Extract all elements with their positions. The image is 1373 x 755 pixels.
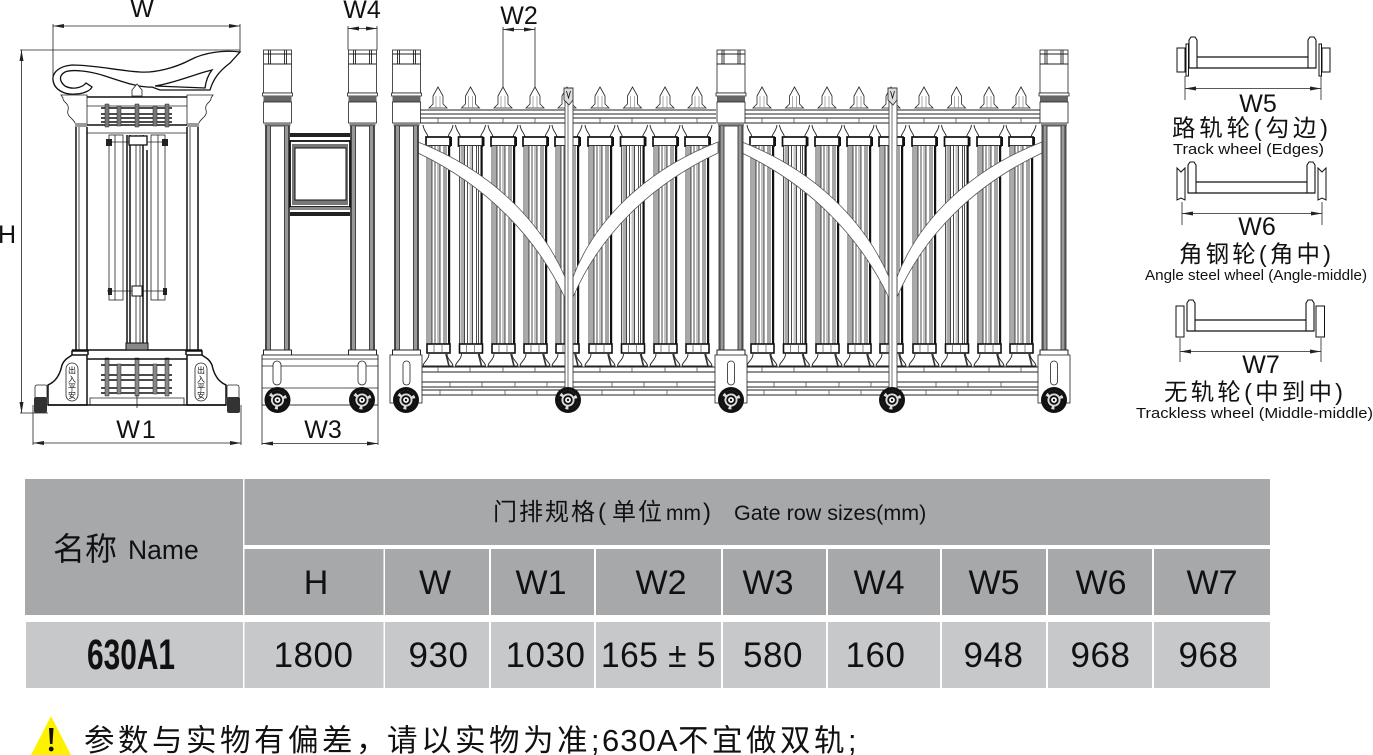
icon: trackless wheel axle — [1187, 300, 1314, 331]
ornamental top scroll — [53, 51, 240, 96]
table header cells: W5 — [968, 564, 1020, 602]
table data row: 630A1: 1030 — [506, 636, 585, 675]
dimension: W6 — [1182, 202, 1322, 241]
dimension: W7: W7 — [1242, 351, 1280, 379]
base scroll plates with lettering: 入 — [68, 375, 76, 384]
side view drawing with W3 and W4 dimensions — [262, 0, 381, 445]
label: angle steel wheel English: Angle steel wheel (Angle-middle) — [1145, 267, 1367, 284]
wheel type W5: track wheel — [1172, 37, 1330, 158]
icon: angle wheel profiles — [1177, 168, 1326, 200]
icon: track wheel hubs — [1177, 44, 1330, 76]
dimension: W2: W2 — [500, 2, 538, 30]
hanging gate bars — [106, 135, 168, 350]
dimension: W6: W6 — [1238, 213, 1276, 241]
base scroll plates with lettering: 出 — [68, 365, 76, 375]
table header: name cell: 名称 — [53, 531, 117, 567]
table data row: 630A1: 1800 — [274, 636, 353, 675]
post capitals and columns — [61, 95, 213, 355]
side wheels — [264, 387, 375, 413]
side control box panel — [290, 133, 350, 216]
base scroll plates with lettering: 出 — [197, 365, 205, 375]
top clamp hardware — [101, 104, 172, 127]
gate span two — [742, 87, 1042, 395]
table header: gate row sizes: 门排规格 — [493, 499, 597, 526]
dimension: W5: W5 — [1239, 90, 1277, 118]
icon: warning triangle — [31, 716, 71, 755]
label: trackless wheel: 无轨轮(中到中) — [1164, 379, 1343, 405]
label: track wheel: 路轨轮(勾边) — [1172, 115, 1328, 141]
table data row: 630A1: 160 — [846, 636, 905, 675]
gate elevation drawing with W2 dimension — [390, 2, 1070, 413]
gate wheels — [393, 387, 1067, 413]
table data row: 630A1: 948 — [964, 636, 1023, 675]
table header cells: W1 — [516, 564, 566, 602]
front castor wheels — [34, 385, 240, 413]
table data row: 630A1: 165 ± 5 — [601, 636, 716, 675]
icon: trackless wheel tyres — [1176, 306, 1324, 337]
icon: angle wheel axle — [1188, 162, 1315, 193]
table header cells: W2 — [636, 564, 686, 602]
side base frame — [262, 355, 378, 405]
gate posts — [392, 50, 1069, 355]
post base blocks — [390, 355, 1070, 403]
table header: name cell — [25, 479, 243, 615]
table header cells: W3 — [742, 564, 794, 602]
table data row: 630A1: 930 — [409, 636, 468, 675]
label: track wheel English: Track wheel (Edges) — [1173, 141, 1324, 158]
base scroll plates with lettering: 平 — [68, 383, 76, 392]
dimension: W7 — [1180, 338, 1321, 379]
table header cells — [244, 549, 1270, 615]
table header cells: W — [419, 564, 451, 602]
dimension: W3 — [262, 405, 378, 445]
table header: gate row sizes: ( — [598, 499, 606, 526]
table header cells: H — [304, 564, 328, 602]
table header: name cell: Name — [128, 535, 199, 565]
specification table — [25, 479, 1270, 688]
table header: gate row sizes — [244, 479, 1270, 545]
dimension: W4 — [343, 0, 381, 50]
bottom clamp hardware — [87, 358, 187, 408]
table data row: 630A1: 968 — [1071, 636, 1130, 675]
table header: gate row sizes: 单位 — [612, 499, 664, 526]
table header: gate row sizes: ) — [703, 499, 711, 526]
wheel type W6: angle steel wheel — [1145, 162, 1367, 284]
dimension: W3: W3 — [304, 416, 342, 444]
table data row: 630A1: 580 — [743, 636, 803, 675]
table header: gate row sizes: Gate row sizes(mm) — [734, 501, 926, 525]
base scroll plates with lettering: 安 — [197, 390, 205, 400]
dimension: W1: W1 — [116, 416, 158, 444]
dimension: W1 — [33, 405, 241, 445]
base scroll plates with lettering: 入 — [197, 375, 205, 384]
dimension: W2 — [500, 2, 538, 88]
table header: gate row sizes: mm — [666, 502, 701, 525]
table header cells: W7 — [1186, 564, 1238, 602]
base scroll plates with lettering — [48, 355, 226, 405]
table header cells: W4 — [854, 564, 904, 602]
table data row: 630A1 — [26, 622, 1270, 688]
base scroll plates with lettering: 平 — [197, 383, 205, 392]
side posts — [262, 50, 378, 355]
dimension: W — [53, 0, 240, 80]
label: trackless wheel English: Trackless wheel (Middle-middle) — [1136, 405, 1373, 422]
label: angle steel wheel: 角钢轮(角中) — [1179, 241, 1331, 267]
gate span one — [418, 87, 718, 395]
icon: track wheel axle — [1189, 37, 1316, 68]
dimension: W5 — [1185, 76, 1321, 118]
table header cells: W6 — [1076, 564, 1126, 602]
wheel type W7: trackless wheel — [1136, 300, 1373, 422]
footnote text — [84, 723, 860, 755]
front view drawing with W, W1 and H dimensions — [0, 0, 241, 445]
table data row: 630A1: 968 — [1179, 636, 1238, 675]
dimension: H — [0, 50, 240, 413]
table data row: 630A1: 630A1 — [87, 631, 175, 679]
base scroll plates with lettering: 安 — [68, 390, 76, 400]
